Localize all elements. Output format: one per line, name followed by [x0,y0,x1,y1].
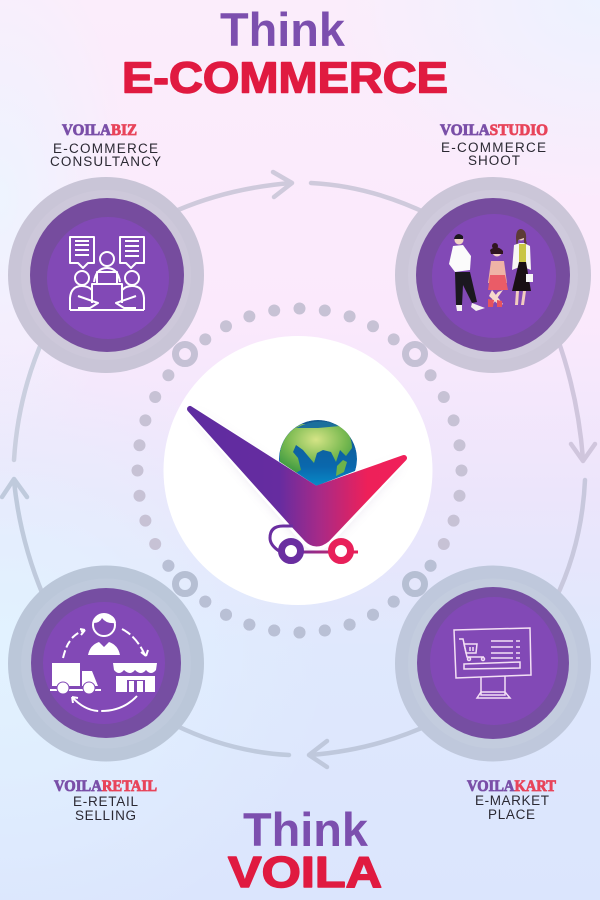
label: VoilaBiz: CONSULTANCY [50,154,161,169]
badge [395,566,591,762]
label: VoilaStudio: E-COMMERCE [441,140,546,155]
label: VoilaRetail: SELLING [75,808,136,823]
icon: globe [279,420,357,486]
label: VoilaKart [467,778,557,822]
icon: customer, truck and store cycle [50,614,157,711]
label: VoilaKart: PLACE [488,807,535,822]
label: VoilaBiz [50,122,161,169]
icon: check mark [188,407,406,546]
label: VoilaBiz: VOILABIZ [62,122,137,139]
label: VoilaBiz: E-COMMERCE [53,141,158,156]
dotted ring [132,302,468,638]
closing title: Think Voila [228,803,382,897]
woman [512,229,533,305]
label: VoilaStudio [440,122,548,168]
label: VoilaRetail: E-RETAIL [73,794,138,809]
panel: VoilaKart [395,566,591,822]
closing title: Think Voila: Think [243,803,369,856]
icon: meeting with speech bubbles [70,237,144,310]
central white circle [164,336,432,605]
label: VoilaStudio: VOILASTUDIO [440,122,548,139]
logo: globe with check-mark cart [188,407,406,560]
cycle arrows [2,172,595,767]
badge [8,566,204,762]
badge [395,177,591,373]
panel: VoilaBiz [8,122,204,373]
man [449,234,485,311]
title: Think E-Commerce [122,3,448,102]
icon: online store monitor [454,628,531,698]
label: VoilaRetail: VOILARETAIL [54,778,157,795]
badge [8,177,204,373]
girl [488,243,508,307]
icon: family fashion models [449,229,533,311]
panel: VoilaStudio [395,122,591,373]
label: VoilaKart: VOILAKART [467,778,557,795]
title: Think E-Commerce: Think [220,3,346,56]
panel: VoilaRetail [8,566,204,823]
title: Think E-Commerce: E-COMMERCE [122,54,448,102]
label: VoilaStudio: SHOOT [468,153,520,168]
closing title: Think Voila: VOILA [228,848,382,897]
label: VoilaKart: E-MARKET [475,793,549,808]
label: VoilaRetail [54,778,157,823]
icon: cart handle and wheels [270,526,358,560]
